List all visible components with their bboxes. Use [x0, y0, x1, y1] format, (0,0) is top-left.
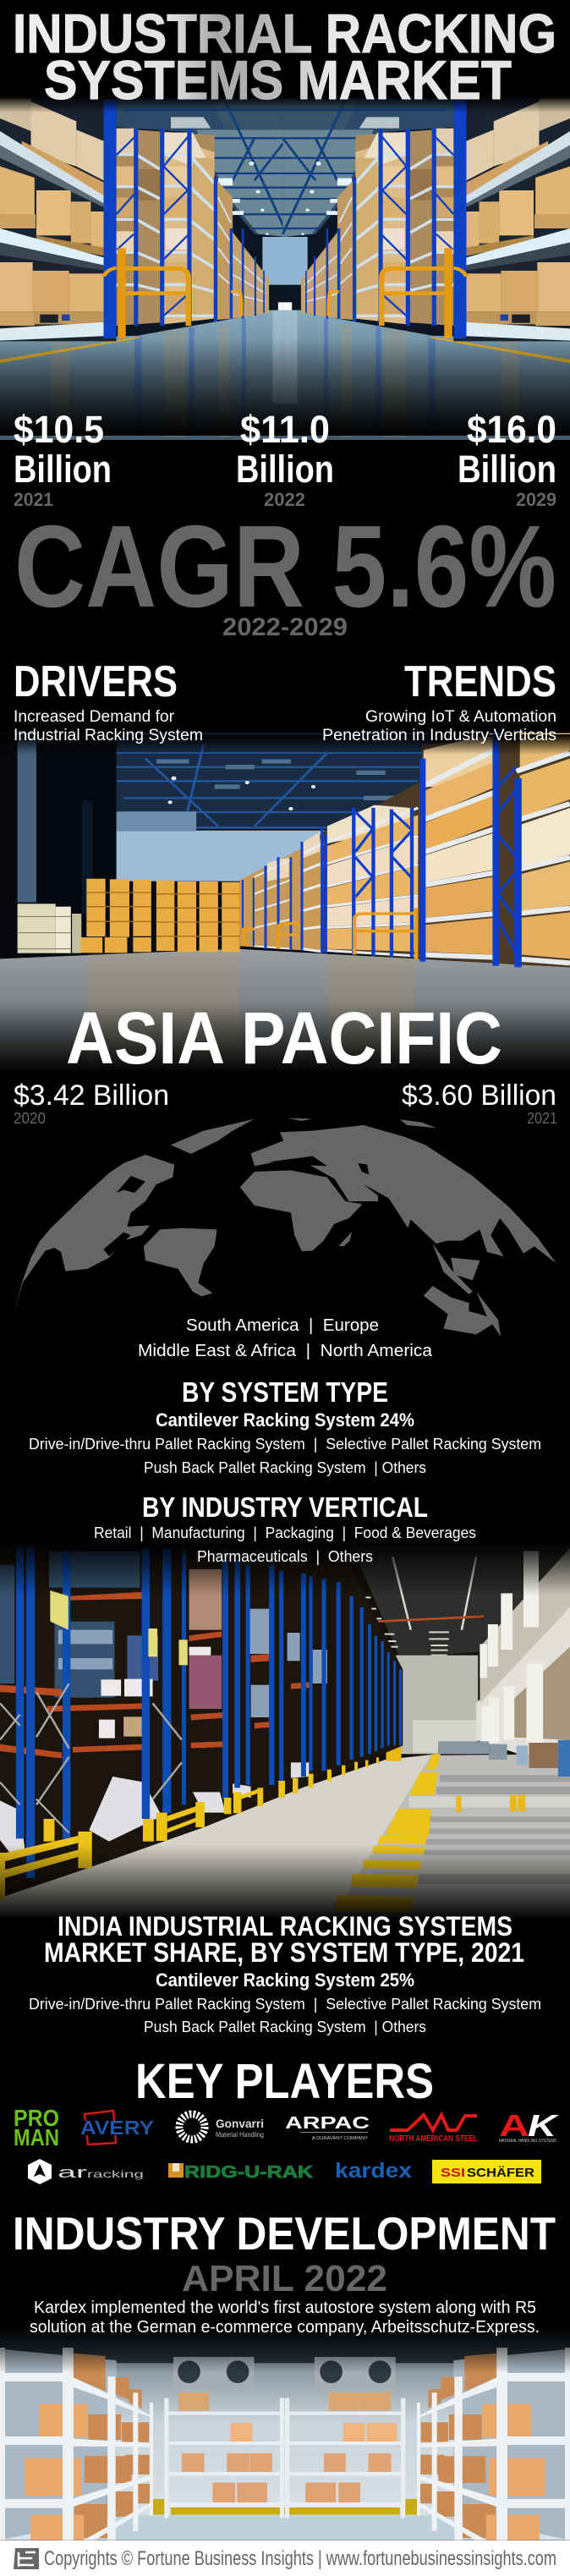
trends block: Penetration in Industry Verticals: [322, 727, 556, 744]
scene: cold storage room illustration: [0, 2326, 570, 2540]
section: by industry vertical: Pharmaceuticals | Others: [197, 1548, 373, 1565]
scene: warehouse aisle with blue racks: [0, 1540, 570, 1920]
stat: 2021 market size: 2021: [14, 489, 53, 510]
drivers block: Increased Demand for: [14, 708, 175, 726]
footer: [0, 2540, 570, 2576]
section: by industry vertical: Retail | Manufacturing | Packaging | Food & Beverages: [94, 1524, 476, 1541]
world map globe: [14, 1118, 556, 1337]
logo: Proman: [14, 2105, 59, 2150]
stat: 2022 market size: $11.0: [240, 408, 330, 451]
stat: 2029 market size: [458, 408, 556, 510]
logo: AK material handling: K: [528, 2108, 560, 2143]
drivers block: [14, 657, 203, 744]
logo: Gonvarri: Material Handling: [216, 2130, 264, 2139]
logo: North American Steel: NORTH AMERICAN STEEL: [389, 2134, 478, 2144]
scene: warehouse floor with stacked pallets: [0, 733, 570, 1074]
logo: North American Steel: [389, 2115, 478, 2144]
logo: Gonvarri: [179, 2114, 264, 2139]
stat: 2029 market size: $16.0: [467, 408, 556, 451]
trends block: [322, 657, 556, 744]
stat: 2029 market size: 2029: [516, 489, 556, 510]
logo: AR racking: racking: [87, 2168, 144, 2180]
logo: SSI Schaefer: SSI: [441, 2166, 465, 2180]
section: India market share: Cantilever Racking System 25%: [156, 1969, 414, 1991]
logo: Arpac: ARPAC: [285, 2114, 370, 2133]
section: by industry vertical: BY INDUSTRY VERTICAL: [142, 1491, 428, 1523]
stat: 2021 market size: [14, 408, 112, 510]
section: by system type: Push Back Pallet Racking System | Others: [144, 1459, 426, 1476]
stat: Asia Pacific 2021: $3.60 Billion: [402, 1079, 556, 1112]
logo: AR racking: [28, 2159, 144, 2184]
logo: Ridg-U-Rak: RIDG-U-RAK: [184, 2163, 314, 2182]
stat: 2022 market size: 2022: [264, 489, 305, 510]
stat: 2022 market size: Billion: [236, 448, 334, 491]
logo: Avery: AVERY: [80, 2117, 154, 2139]
logo: AR racking: ar: [58, 2164, 87, 2181]
logo: Avery: [80, 2111, 154, 2145]
stat: Asia Pacific 2020: $3.42 Billion: [14, 1079, 169, 1112]
trends block: Growing IoT & Automation: [365, 708, 556, 726]
section: industry development: APRIL 2022: [182, 2258, 387, 2299]
title: [13, 3, 556, 111]
list: regions: South America | Europe: [186, 1316, 379, 1335]
stat: Asia Pacific 2021: 2021: [527, 1110, 557, 1127]
section: by system type: [29, 1376, 541, 1476]
logo: Arpac: A DURAVANT COMPANY: [312, 2136, 368, 2141]
stat: Asia Pacific 2020: [14, 1079, 169, 1127]
section: industry development: solution at the German e-commerce company, Arbeitsschutz-Express.: [30, 2318, 540, 2337]
list: regions: Middle East & Africa | North America: [138, 1342, 433, 1360]
heading: key players: KEY PLAYERS: [135, 2054, 434, 2109]
stat: 2021 market size: Billion: [14, 448, 112, 491]
section: India market share: Push Back Pallet Racking System | Others: [144, 2019, 426, 2035]
logo: Proman: PRO: [14, 2105, 59, 2131]
section: by system type: BY SYSTEM TYPE: [182, 1376, 388, 1408]
section: by industry vertical: [94, 1491, 476, 1565]
list: regions: [138, 1316, 433, 1360]
drivers block: Industrial Racking System: [14, 727, 203, 744]
logo: Kardex: kardex: [335, 2159, 412, 2183]
logo: AK material handling: MATERIAL HANDLING SYSTEMS: [499, 2139, 557, 2144]
logo: AK material handling: A: [499, 2108, 529, 2143]
stat: 2022 market size: [236, 408, 334, 510]
title: SYSTEMS MARKET: [44, 49, 512, 111]
hero image: warehouse aisle: [0, 96, 570, 440]
section: India market share: [29, 1911, 541, 2035]
logo: SSI Schaefer: [432, 2160, 541, 2183]
stat: Asia Pacific 2021: [402, 1079, 557, 1127]
section: industry development: Kardex implemented the world's first autostore system along with R5: [34, 2299, 536, 2317]
logo: Gonvarri: Gonvarri: [216, 2117, 264, 2130]
heading: Asia Pacific: ASIA PACIFIC: [66, 997, 502, 1079]
logo: AK material handling: [499, 2108, 560, 2144]
section: by system type: Cantilever Racking System 24%: [156, 1409, 414, 1431]
logo: SSI Schaefer: SCHÄFER: [467, 2166, 534, 2180]
stat: 2021 market size: $10.5: [14, 408, 104, 451]
stat: Asia Pacific 2020: 2020: [14, 1110, 46, 1127]
drivers block: DRIVERS: [14, 657, 178, 706]
logo: Arpac: [285, 2114, 370, 2141]
logo: Proman: MAN: [14, 2124, 59, 2150]
section: by system type: Drive-in/Drive-thru Pallet Racking System | Selective Pallet Racking System: [29, 1436, 541, 1453]
CAGR figure: 2022-2029: [222, 613, 348, 641]
section: industry development: [13, 2207, 556, 2337]
section: India market share: INDIA INDUSTRIAL RACKING SYSTEMS: [58, 1911, 512, 1942]
section: India market share: Drive-in/Drive-thru Pallet Racking System | Selective Pallet Racking System: [29, 1996, 541, 2013]
